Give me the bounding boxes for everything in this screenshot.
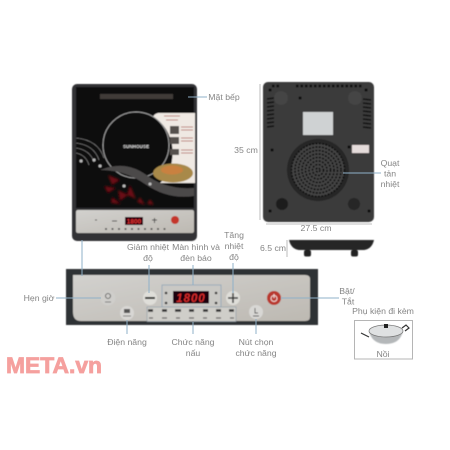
display group frame (162, 285, 221, 307)
glass cooktop (76, 87, 194, 208)
label: increase heat: nhiệt (225, 241, 244, 251)
timer button (100, 290, 116, 306)
brand name: SUNHOUSE (123, 144, 149, 149)
power button (267, 291, 281, 305)
minus button (143, 291, 157, 305)
power button (171, 216, 179, 224)
label: decrease heat: Giảm nhiệt (127, 242, 170, 252)
label: cooking functions: Chức năng (171, 337, 215, 347)
label: energy: Điện năng (107, 337, 147, 347)
label: height: 35 cm (234, 145, 258, 155)
label: increase heat: độ (229, 252, 239, 262)
label: depth: 6.5 cm (260, 243, 286, 253)
menu button (249, 305, 263, 319)
function icons (148, 309, 234, 312)
lid knob (384, 324, 388, 328)
swirl dots (81, 160, 150, 186)
red glow pattern (104, 175, 154, 205)
panel buttons (95, 218, 157, 223)
top warning text strip (100, 94, 173, 99)
label: decrease heat: độ (143, 253, 153, 263)
text labels (24, 92, 414, 358)
pot label: Nồi (376, 349, 390, 359)
accessory box (354, 320, 412, 359)
label: fan: Quạt (381, 158, 400, 168)
fan housing (287, 139, 349, 201)
bottom body (263, 82, 374, 222)
plus button (226, 291, 240, 305)
label: function select: Nút chọn (239, 337, 274, 347)
panel frame (66, 269, 318, 325)
stove top view (72, 84, 197, 241)
promo icons (170, 126, 179, 155)
screw holes (270, 90, 369, 211)
leader lines (56, 97, 381, 334)
vents right (363, 99, 371, 128)
box frame (354, 320, 412, 359)
control panel enlarged (66, 269, 318, 325)
stove bottom view (263, 82, 374, 222)
swirl lines (76, 138, 104, 165)
pot body (369, 331, 403, 344)
dimension lines (260, 84, 372, 257)
vents left (267, 98, 274, 127)
stove body (72, 84, 197, 241)
silver plate (73, 275, 310, 321)
label: power: Tắt (342, 296, 355, 306)
rubber feet (276, 198, 288, 210)
label sticker (303, 112, 333, 135)
function row (105, 228, 167, 230)
cooking zone ring (103, 112, 169, 178)
pot lid (369, 325, 403, 337)
fan grille (292, 144, 344, 196)
label: cooking functions: nấu (186, 348, 200, 358)
label: fan: tản (384, 168, 396, 178)
promo text (164, 116, 193, 153)
label: function select: chức năng (235, 348, 277, 358)
display indicators (166, 293, 216, 303)
control panel (76, 210, 194, 233)
label: accessories: Phụ kiện đi kèm (352, 306, 414, 316)
label: fan: nhiệt (381, 179, 400, 189)
label: width: 27.5 cm (301, 223, 331, 233)
stove top view: 1800 (127, 219, 142, 226)
small sticker (352, 145, 369, 153)
pot handles (361, 325, 409, 337)
label: display: đèn báo (180, 253, 212, 263)
food photo (153, 164, 193, 182)
LED display (173, 291, 209, 304)
label: cooktop: Mặt bếp (208, 92, 240, 102)
label: timer: Hẹn giờ (24, 293, 55, 303)
label: display: Màn hình và (172, 242, 220, 252)
panel display (125, 217, 143, 225)
control panel enlarged: 1800 (176, 293, 206, 305)
function buttons (147, 307, 236, 322)
label: increase heat: Tăng (224, 230, 244, 240)
decorative swoosh (100, 166, 194, 197)
vents top (272, 85, 362, 87)
label: power: Bật/ (339, 286, 355, 296)
watermark: META.vn (6, 353, 102, 378)
promo card (153, 113, 195, 183)
energy button (120, 306, 134, 320)
stove side view (289, 240, 374, 256)
